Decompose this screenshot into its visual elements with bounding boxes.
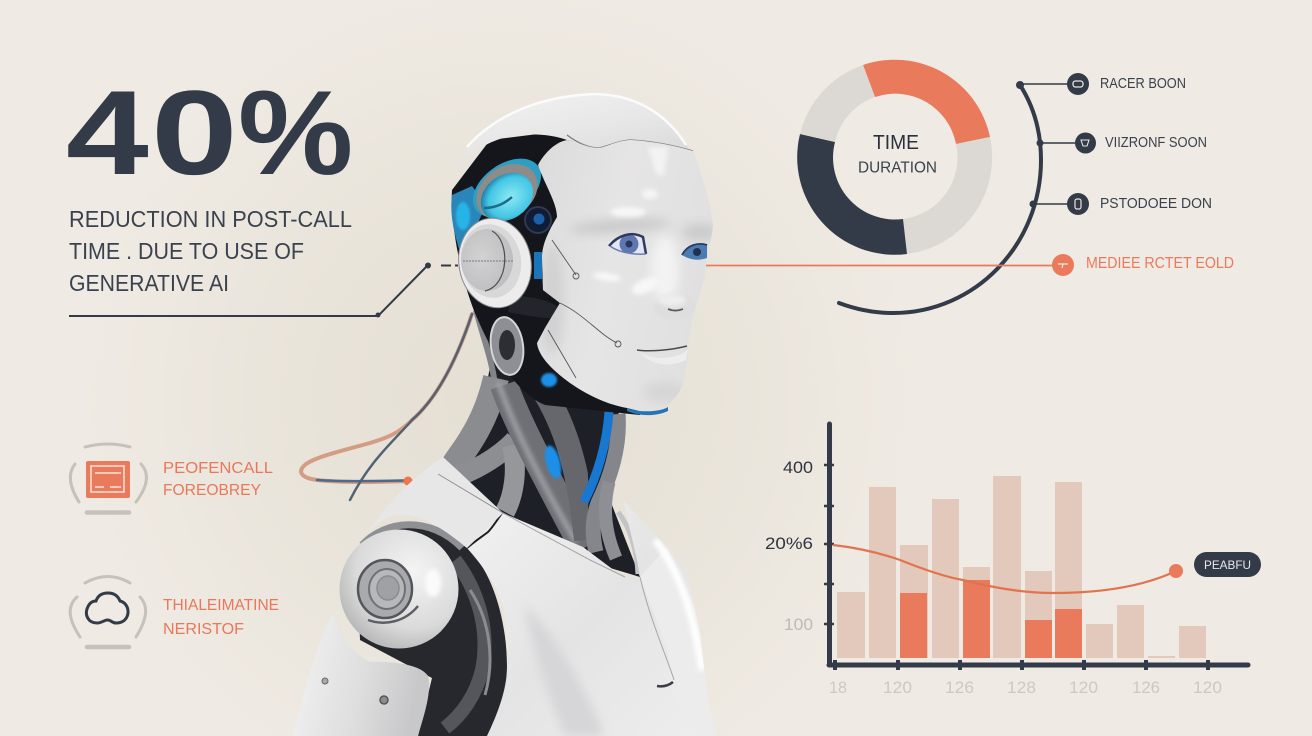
face plate (537, 140, 713, 412)
x axis labels: 126 (1132, 678, 1160, 697)
label: second feature (163, 597, 279, 638)
y axis labels: 20%6 (765, 534, 813, 553)
heading: 40% statistic: 0 (151, 66, 238, 200)
right eye (682, 244, 707, 260)
x axis labels: 120 (1069, 678, 1098, 697)
callout: highlighted orange item with pointer from face (706, 254, 1234, 276)
trend label pill: PEABFU (1204, 560, 1251, 572)
cables from headset to dot (301, 314, 472, 500)
text block: reduction description: REDUCTION IN POST-CALL (69, 206, 352, 232)
label: second feature: NERISTOF (163, 621, 244, 638)
x axis labels: 128 (1007, 678, 1036, 697)
x axis labels: 126 (945, 678, 974, 697)
leader line from description to headset (69, 262, 458, 318)
arc connector (839, 85, 1041, 313)
axes (824, 424, 1248, 670)
text block: reduction description (69, 206, 352, 296)
shoulder plate (368, 457, 503, 548)
y axis labels (765, 458, 813, 634)
callout: highlighted orange item with pointer from face: MEDIEE RCTET EOLD (1086, 255, 1234, 272)
nose and mouth (668, 309, 683, 311)
label: first feature (163, 460, 273, 499)
bars: background series (837, 476, 1206, 658)
callout: first legend item (1016, 73, 1186, 95)
donut chart: time duration: TIME (873, 132, 919, 154)
text block: reduction description: GENERATIVE AI (69, 270, 229, 296)
x axis labels: 18 (829, 678, 847, 697)
bars: highlighted series (900, 580, 1082, 658)
dark joint behind shoulder (357, 525, 507, 736)
callout: third legend item: PSTODOEE DON (1100, 196, 1212, 212)
left eye (610, 234, 646, 254)
callout: second legend item (1036, 132, 1207, 154)
callout: second legend item: VIIZRONF SOON (1105, 135, 1207, 151)
shoulder ball joint (340, 530, 458, 648)
label: first feature: PEOFENCALL (163, 460, 273, 477)
heading: 40% statistic (66, 66, 353, 200)
trend label pill (1194, 552, 1261, 577)
icon: cloud badge (70, 576, 146, 647)
label: first feature: FOREOBREY (163, 482, 261, 499)
robot illustration (292, 94, 718, 736)
torso panel (467, 500, 716, 736)
headset ear cup (452, 212, 538, 314)
callout: first legend item: RACER BOON (1100, 76, 1186, 92)
face seam lines (548, 240, 621, 378)
bar chart (765, 424, 1261, 697)
callout: third legend item (1030, 193, 1212, 215)
neck cables (450, 303, 640, 577)
x axis labels: 120 (883, 678, 912, 697)
head cap and face (456, 94, 718, 415)
donut chart: time duration (797, 60, 992, 255)
heading: 40% statistic: % (238, 66, 353, 200)
face shading and highlights (540, 147, 718, 402)
heading: 40% statistic: 4 (66, 66, 149, 200)
label: second feature: THIALEIMATINE (163, 597, 279, 614)
x axis labels: 120 (1193, 678, 1222, 697)
trend line (833, 545, 1183, 593)
y axis labels: 400 (783, 458, 813, 477)
icon: screen badge (70, 444, 146, 512)
upper arm (292, 613, 429, 736)
head back mechanics (451, 130, 640, 415)
text block: reduction description: TIME . DUE TO USE OF (69, 238, 304, 264)
x axis labels (829, 678, 1222, 697)
y axis labels: 100 (784, 615, 813, 634)
donut chart: time duration: DURATION (858, 160, 937, 176)
